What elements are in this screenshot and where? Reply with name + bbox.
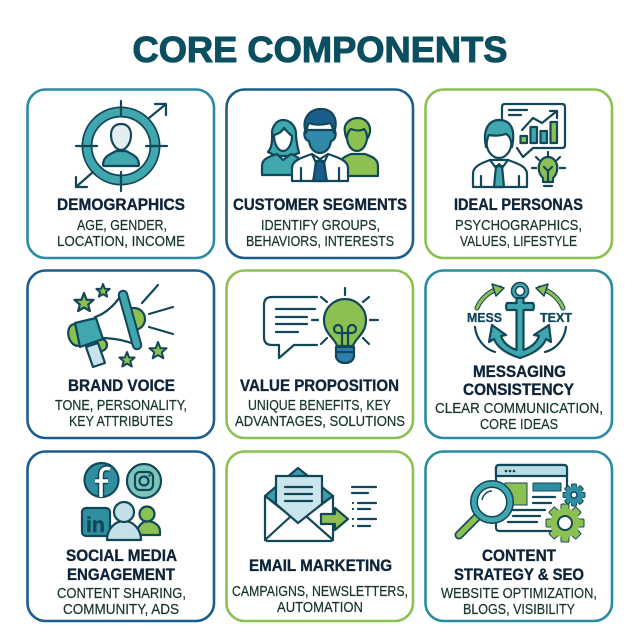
- description: TONE, PERSONALITY,: [55, 398, 187, 414]
- description: [57, 218, 185, 250]
- heading: [463, 363, 574, 399]
- description: BEHAVIORS, INTERESTS: [246, 234, 394, 250]
- icon: social networks and people: [82, 463, 161, 540]
- title: CORE COMPONENTS: [132, 29, 508, 70]
- card border: [28, 452, 214, 621]
- heading: CONTENT: [482, 547, 556, 565]
- description: BLOGS, VISIBILITY: [463, 602, 575, 618]
- icon: social networks and people: in: [86, 514, 105, 537]
- icon: target with person: [76, 101, 167, 191]
- description: CLEAR COMMUNICATION,: [435, 401, 603, 417]
- card border: [226, 452, 413, 621]
- description: ADVANTAGES, SOLUTIONS: [235, 414, 405, 430]
- description: AUTOMATION: [277, 600, 363, 616]
- description: CAMPAIGNS, NEWSLETTERS,: [232, 584, 408, 600]
- heading: BRAND VOICE: [68, 377, 175, 395]
- heading: MESSAGING: [473, 363, 566, 381]
- heading: CONSISTENCY: [463, 381, 574, 399]
- description: AGE, GENDER,: [77, 218, 167, 234]
- description: [232, 584, 408, 616]
- heading: STRATEGY & SEO: [454, 566, 584, 584]
- heading: ENGAGEMENT: [67, 566, 175, 584]
- description: [57, 586, 186, 618]
- panel: brand voice: [28, 270, 214, 438]
- heading: VALUE PROPOSITION: [240, 377, 399, 395]
- panel: content strategy and seo: [426, 452, 612, 621]
- panel: ideal personas: [426, 90, 612, 258]
- description: [441, 586, 597, 618]
- card border: [28, 90, 214, 258]
- heading: CUSTOMER SEGMENTS: [233, 196, 407, 214]
- description: IDENTIFY GROUPS,: [261, 218, 380, 234]
- card border: [426, 90, 612, 258]
- description: [435, 401, 603, 433]
- heading: EMAIL MARKETING: [249, 557, 392, 575]
- icon: browser, magnifier and gears: [459, 465, 585, 542]
- heading: DEMOGRAPHICS: [57, 196, 185, 214]
- panel: email marketing: [226, 452, 413, 621]
- description: [455, 218, 582, 250]
- description: PSYCHOGRAPHICS,: [455, 218, 582, 234]
- description: CONTENT SHARING,: [57, 586, 186, 602]
- card border: [426, 452, 612, 621]
- description: [55, 398, 187, 430]
- panel: value proposition: [226, 270, 413, 438]
- panel: customer segments: [226, 90, 413, 258]
- panel: social media engagement: [28, 452, 214, 621]
- description: VALUES, LIFESTYLE: [460, 234, 577, 250]
- icon: megaphone with stars: [66, 284, 173, 367]
- panel: demographics: [28, 90, 214, 258]
- icon: anchor with arrows: TEXT: [540, 310, 572, 325]
- description: [246, 218, 394, 250]
- icon: envelope with arrow: [265, 468, 376, 541]
- card border: [226, 270, 413, 438]
- description: CORE IDEAS: [480, 417, 558, 433]
- icon: persona with chart and bulb: [473, 104, 565, 187]
- panel: messaging consistency: [426, 270, 612, 438]
- description: [235, 398, 405, 430]
- heading: [454, 547, 584, 584]
- heading: [66, 547, 177, 584]
- card border: [28, 270, 214, 438]
- icon: anchor with arrows: [467, 284, 572, 358]
- icon: speech bubble and light bulb: [264, 288, 378, 363]
- icon: anchor with arrows: MESS: [467, 310, 502, 325]
- description: LOCATION, INCOME: [57, 234, 185, 250]
- card border: [426, 270, 612, 438]
- card border: [226, 90, 413, 258]
- description: UNIQUE BENEFITS, KEY: [248, 398, 391, 414]
- icon: three people: [262, 109, 378, 181]
- heading: IDEAL PERSONAS: [454, 196, 583, 214]
- heading: SOCIAL MEDIA: [66, 547, 177, 565]
- description: KEY ATTRIBUTES: [69, 414, 173, 430]
- description: COMMUNITY, ADS: [63, 602, 179, 618]
- description: WEBSITE OPTIMIZATION,: [441, 586, 597, 602]
